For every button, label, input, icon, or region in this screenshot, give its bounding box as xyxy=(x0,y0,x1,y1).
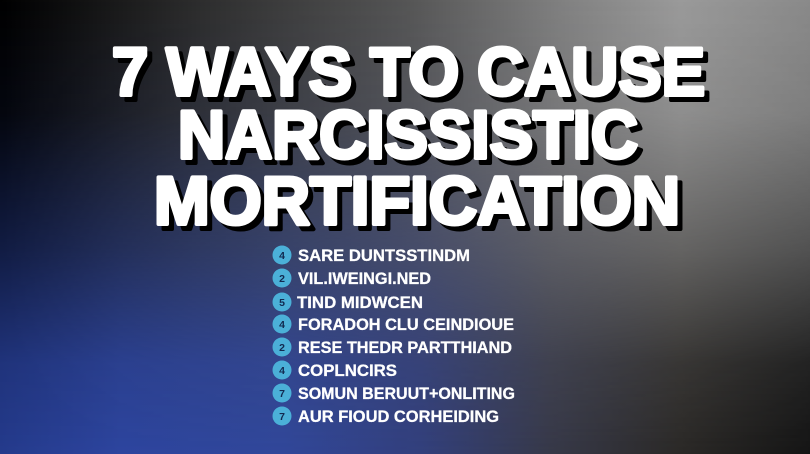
list item 2: VIL.IWEINGI.NED xyxy=(298,269,431,288)
title: NARCISSISTIC xyxy=(178,97,638,173)
list item 2: 2 xyxy=(279,273,285,285)
list item 6: 4 xyxy=(279,365,285,377)
title: 7 WAYS TO CAUSE xyxy=(112,34,705,110)
list item 7: SOMUN BERUUT+ONLITING xyxy=(298,384,515,403)
list item 4: FORADOH CLU CEINDIOUE xyxy=(298,315,514,334)
list item 8: AUR FIOUD CORHEIDING xyxy=(298,407,499,426)
list item 5: RESE THEDR PARTTHIAND xyxy=(298,338,512,357)
title: MORTIFICATION xyxy=(154,163,680,239)
list item 7: 7 xyxy=(279,388,285,400)
list item 5: 2 xyxy=(279,342,285,354)
list item 1: 4 xyxy=(279,250,285,262)
list item 8: 7 xyxy=(279,411,285,423)
list item 3: 5 xyxy=(279,297,285,309)
list item 4: 4 xyxy=(279,319,285,331)
list item 3: TIND MIDWCEN xyxy=(297,293,423,312)
list item 1: SARE DUNTSSTINDM xyxy=(298,246,470,265)
list of seven ways xyxy=(272,246,515,426)
title xyxy=(112,34,705,239)
list item 6: COPLNCIRS xyxy=(298,361,397,380)
